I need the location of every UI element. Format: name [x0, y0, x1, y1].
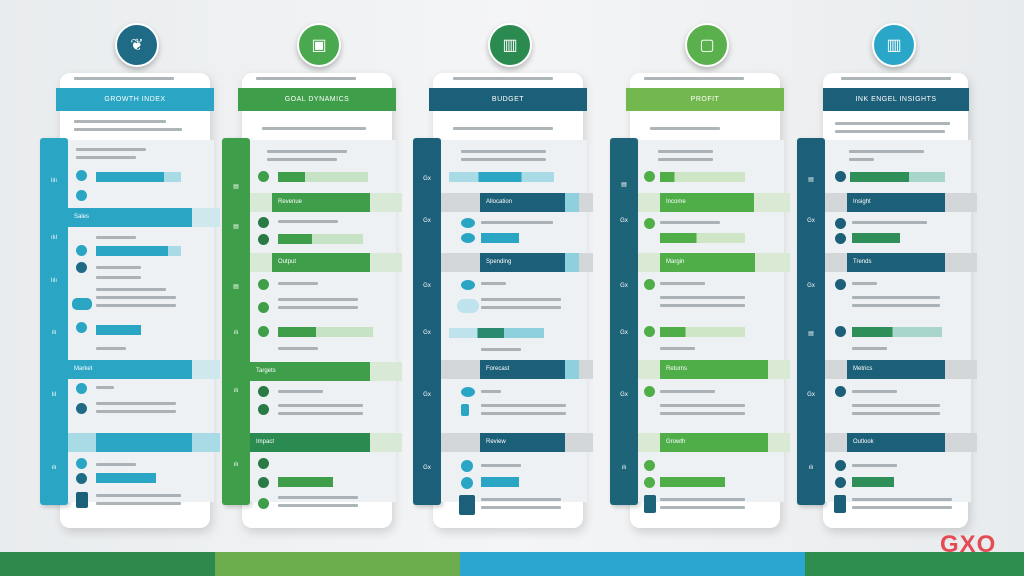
column 2: ılı [234, 388, 238, 394]
header 5 [823, 88, 969, 111]
column 5: Gx [807, 283, 815, 289]
band 4c [638, 360, 790, 379]
band 3b [441, 253, 593, 272]
column 5: Trends [853, 259, 871, 265]
band 3a [441, 193, 593, 212]
icon: column 4 [685, 23, 729, 67]
column 2: Revenue [278, 199, 302, 205]
band 4b [638, 253, 790, 272]
column 5: Gx [807, 392, 815, 398]
band 1c [68, 433, 220, 452]
icon: column 2: ▣ [311, 37, 327, 54]
column 4: Gx [620, 330, 628, 336]
icon: column 1: ❦ [130, 37, 144, 54]
column 5: Outlook [853, 439, 874, 445]
band 4a [638, 193, 790, 212]
column 4: Gx [620, 392, 628, 398]
band 2b [250, 253, 402, 272]
column 2: ▤ [233, 224, 239, 230]
column 4: ▤ [621, 182, 627, 188]
column 2: Targets [256, 368, 276, 374]
sidebar 5 [797, 138, 825, 505]
column 4 [610, 23, 790, 536]
icon: column 5: ▥ [886, 37, 902, 54]
band 2c [250, 362, 402, 381]
column 1: lıl [52, 392, 56, 398]
icon: column 4: ▢ [699, 37, 715, 54]
column 1: ılı [52, 330, 56, 336]
header 2: GOAL DYNAMICS [285, 96, 349, 103]
band 5b [825, 253, 977, 272]
column 4: Returns [666, 366, 687, 372]
column 2: ılı [234, 330, 238, 336]
column 1: Market [74, 366, 92, 372]
column 3: Gx [423, 330, 431, 336]
column 5: ▤ [808, 331, 814, 337]
card 5 [823, 73, 968, 528]
header 3: BUDGET [492, 96, 524, 103]
column 3: Gx [423, 465, 431, 471]
band 2a [250, 193, 402, 212]
header 4 [626, 88, 784, 111]
band 1a [68, 208, 220, 227]
bottom colour bar [0, 552, 1024, 576]
column 1 [40, 23, 220, 536]
column 5: Insight [853, 199, 871, 205]
column 3: Gx [423, 283, 431, 289]
column 3: Gx [423, 218, 431, 224]
band 1b [68, 360, 220, 379]
column 5: ▤ [808, 177, 814, 183]
column 3: Gx [423, 176, 431, 182]
band 5c [825, 360, 977, 379]
icon: column 1 [115, 23, 159, 67]
column 1: ılıl [51, 235, 57, 241]
band 3d [441, 433, 593, 452]
header 1 [56, 88, 214, 111]
card 1 [60, 73, 210, 528]
card 4 [630, 73, 780, 528]
header 4: PROFIT [691, 96, 719, 103]
column 4: Income [666, 199, 686, 205]
band 3c [441, 360, 593, 379]
column 5 [797, 23, 977, 536]
column 5: Metrics [853, 366, 872, 372]
column 3: Gx [423, 392, 431, 398]
sidebar 1 [40, 138, 68, 505]
icon: column 3: ▥ [502, 37, 518, 54]
column 3: Allocation [486, 199, 512, 205]
column 2: ▤ [233, 184, 239, 190]
column 1: lılı [51, 278, 57, 284]
column 4: Margin [666, 259, 684, 265]
column 2: Output [278, 259, 296, 265]
column 2 [222, 23, 402, 536]
column 3 [413, 23, 593, 536]
column 3: Forecast [486, 366, 509, 372]
band 2d [250, 433, 402, 452]
sidebar 3 [413, 138, 441, 505]
column 4: Gx [620, 283, 628, 289]
logo: GXO: GXO [940, 531, 996, 558]
column 4: Growth [666, 439, 685, 445]
column 4: Gx [620, 218, 628, 224]
band 5a [825, 193, 977, 212]
column 3: Review [486, 439, 506, 445]
column 2: Impact [256, 439, 274, 445]
column 3: Spending [486, 259, 511, 265]
column 1: ılı [52, 465, 56, 471]
icon: column 3 [488, 23, 532, 67]
header 1: GROWTH INDEX [104, 96, 166, 103]
sidebar 4 [610, 138, 638, 505]
column 5: Gx [807, 218, 815, 224]
header 2 [238, 88, 396, 111]
band 5d [825, 433, 977, 452]
column 5: ılı [809, 465, 813, 471]
header 3 [429, 88, 587, 111]
column 1: lılı [51, 178, 57, 184]
column 2: ▤ [233, 284, 239, 290]
header 5: INK ENGEL INSIGHTS [855, 96, 937, 103]
column 4: ılı [622, 465, 626, 471]
sidebar 2 [222, 138, 250, 505]
icon: column 5 [872, 23, 916, 67]
card 2 [242, 73, 392, 528]
column 2: ılı [234, 462, 238, 468]
band 4d [638, 433, 790, 452]
icon: column 2 [297, 23, 341, 67]
column 1: Sales [74, 214, 89, 220]
card 3 [433, 73, 583, 528]
